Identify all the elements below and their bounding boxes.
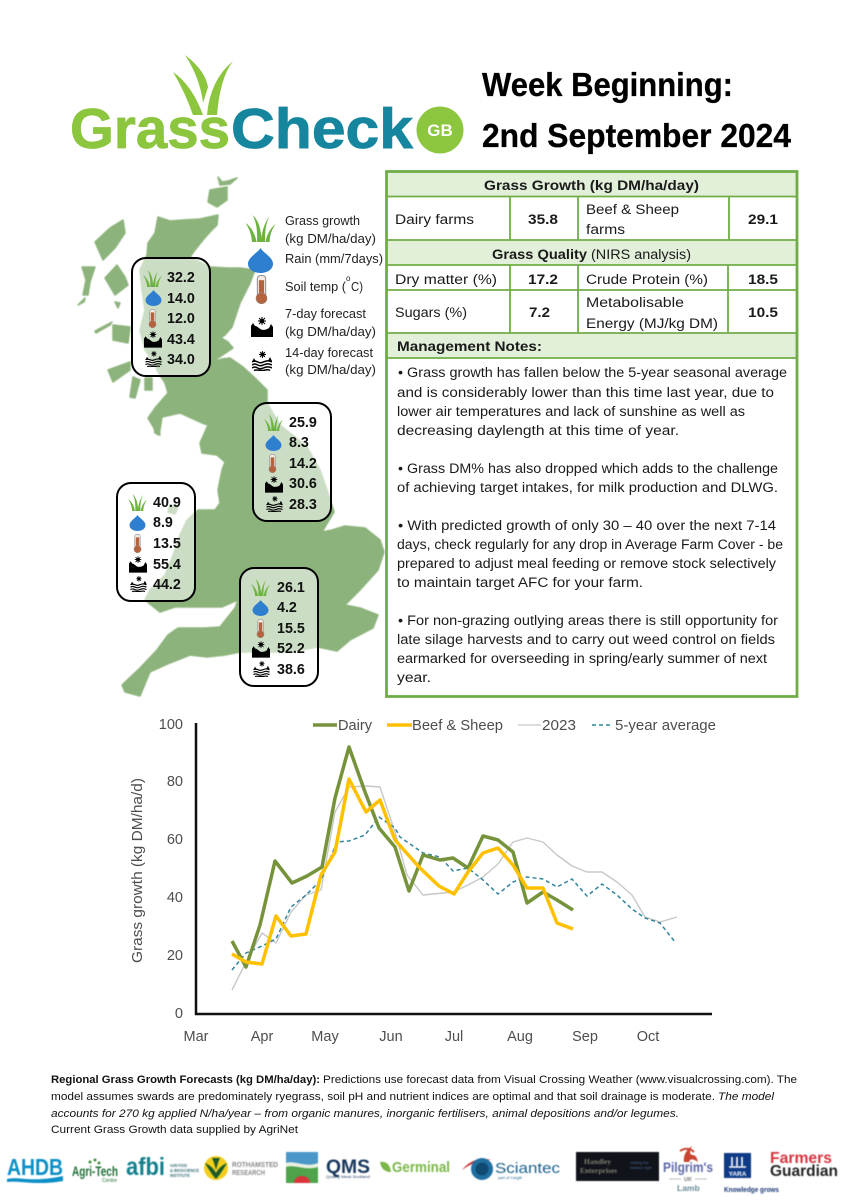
regional panel: Scotland: [132, 258, 210, 376]
table row: dry matter and crude protein: [395, 272, 778, 288]
icon: rain: [248, 248, 273, 273]
management note 2: [397, 461, 778, 496]
footnote text: Predictions use forecast data from Visual Crossing Weather (www.visualcrossing.com). The: [323, 1074, 797, 1086]
management note 3: to maintain target AFC for your farm.: [397, 575, 643, 591]
regional panel: South England: 4.2: [277, 600, 297, 616]
table row: dairy and beef and sheep growth: farms: [586, 222, 625, 238]
legend text: soil temp: [285, 274, 363, 294]
legend text: soil temp: o: [346, 274, 351, 283]
table row: dry matter and crude protein: Crude Protein (%): [586, 272, 708, 288]
logo: Farmers Guardian: [770, 1150, 838, 1180]
logo: GrassCheck GB: Check: [231, 97, 413, 161]
management note 3: [397, 518, 783, 591]
line chart: grass growth: [130, 717, 716, 1045]
management note 1: and is considerably lower than this time last year, due to: [397, 385, 774, 401]
logo: Farmers Guardian: Guardian: [770, 1163, 838, 1180]
management note 3: prepared to adjust meal feeding or remove stock selectively: [397, 556, 777, 572]
title: week beginning: 2nd September 2024: [482, 117, 792, 154]
table row: dry matter and crude protein: 18.5: [748, 272, 778, 288]
management note 1: decreasing daylength at this time of year.: [397, 423, 679, 439]
table row: dry matter and crude protein: Dry matter (%): [395, 272, 497, 288]
regional panel: Scotland: 43.4: [167, 332, 195, 348]
logo: Agri-Tech Centre: Agri-Tech: [72, 1164, 118, 1179]
logo: Agri-Tech Centre: [72, 1158, 118, 1184]
regional panel: South England: 26.1: [277, 580, 305, 596]
x axis labels: Oct: [637, 1029, 659, 1045]
footnote text: [51, 1074, 797, 1136]
logo: Sciantec: [462, 1158, 561, 1180]
table row: sugars and metabolisable energy: Energy (MJ/kg DM): [586, 316, 718, 332]
logo: AFBI: afbi: [126, 1153, 165, 1181]
legend text: grass growth: Grass growth: [285, 214, 360, 228]
footnote text: The model: [718, 1091, 775, 1103]
table row: dairy and beef and sheep growth: [395, 202, 778, 238]
x axis labels: Aug: [507, 1029, 533, 1045]
regional panel: Wales: 8.9: [153, 515, 173, 531]
icon: soil temperature: [256, 276, 267, 304]
regional panel: Scotland: 12.0: [167, 311, 195, 327]
logo: green and blue square: [286, 1152, 318, 1183]
logo: Rothamsted Research: ROTHAMSTED: [232, 1162, 278, 1169]
regional panel: North England: [253, 403, 331, 521]
regional panel: Wales: 13.5: [153, 536, 181, 552]
regional panel: Scotland: 32.2: [167, 270, 195, 286]
logo: Sciantec: part of Cargill: [498, 1175, 522, 1180]
icon: logo grass blades: [173, 55, 233, 115]
logo: AFBI: INSTITUTE: [170, 1173, 191, 1179]
x axis labels: Apr: [251, 1029, 273, 1045]
logo: Pilgrims UK Lamb: UK: [684, 1177, 692, 1183]
chart legend: Beef & Sheep: [412, 718, 503, 734]
logo: Yara: Knowledge grows: [724, 1187, 779, 1194]
x axis labels: Jun: [379, 1029, 403, 1045]
y axis labels: 20: [167, 948, 183, 964]
legend text: 14-day forecast: [285, 346, 376, 377]
table row: sugars and metabolisable energy: Metabolisable: [586, 295, 684, 311]
y axis labels: 40: [167, 890, 183, 906]
logo: Handley Enterprises: Enterprises: [580, 1166, 617, 1175]
regional panel: South England: 52.2: [277, 641, 305, 657]
legend text: 7-day forecast: (kg DM/ha/day): [285, 325, 376, 339]
x axis labels: Sep: [572, 1029, 598, 1045]
legend text: soil temp: Soil temp (: [285, 280, 347, 294]
chart legend: 5-year average: [615, 718, 716, 734]
map legend: [246, 214, 383, 377]
table header: grass quality: (NIRS analysis): [591, 247, 691, 263]
regional panel: Wales: 55.4: [153, 557, 181, 573]
logo: AFBI: [126, 1153, 200, 1181]
y axis labels: 100: [159, 717, 183, 733]
icon: 14-day forecast: [252, 351, 272, 371]
logo: Handley Enterprises: balance right: [630, 1166, 653, 1170]
table header: grass growth: [387, 172, 797, 196]
table header: grass quality: [387, 240, 797, 265]
footnote text: accounts for 270 kg applied N/ha/year – from organic manures, inorganic fertilisers, animal depositions and/or legumes.: [51, 1108, 679, 1120]
axes: [196, 723, 712, 1014]
map of Great Britain: [78, 177, 384, 696]
x axis labels: [184, 1029, 659, 1045]
icon: 7-day forecast: [251, 317, 273, 337]
footnote text: model assumes swards are predominately ryegrass, soil pH and nutrient indices are optimal and that soil drainage is moderate.: [51, 1091, 715, 1103]
logo: Rothamsted Research: [204, 1156, 278, 1180]
legend text: soil temp: C): [351, 280, 363, 294]
logo: Pilgrims UK Lamb: Lamb: [677, 1183, 700, 1193]
management note 4: earmarked for overseeding in spring/early summer of next: [397, 651, 767, 667]
series: 2023: [232, 786, 677, 990]
management note 3: days, check regularly for any drop in Average Farm Cover - be: [397, 537, 783, 553]
regional panel: South England: 15.5: [277, 621, 305, 637]
management note 3: • With predicted growth of only 30 – 40 over the next 7-14: [398, 518, 776, 534]
legend text: grass growth: [285, 214, 376, 246]
table header: grass quality: Grass Quality: [492, 247, 587, 263]
y axis labels: [159, 717, 183, 1022]
logo: AFBI: AGRI FOOD: [170, 1163, 187, 1169]
panel: data table and management notes: [386, 172, 797, 696]
footnote text: Regional Grass Growth Forecasts (kg DM/ha/day):: [51, 1074, 320, 1086]
chart legend: 2023: [542, 718, 576, 734]
logo: Handley Enterprises: Getting the: [630, 1161, 649, 1165]
logo: GrassCheck GB: [70, 55, 464, 161]
management note 2: • Grass DM% has also dropped which adds to the challenge: [398, 461, 778, 477]
regional panel: North England: 28.3: [289, 497, 317, 513]
legend text: 14-day forecast: (kg DM/ha/day): [285, 363, 376, 377]
table row: dairy and beef and sheep growth: Dairy farms: [395, 212, 474, 228]
management note 1: • Grass growth has fallen below the 5-year seasonal average: [398, 365, 787, 381]
chart legend: [313, 718, 716, 734]
regional panel: South England: 38.6: [277, 662, 305, 678]
table header: grass growth: Grass Growth (kg DM/ha/day): [484, 178, 699, 194]
logo: Handley Enterprises: Handley: [584, 1157, 611, 1166]
table row: dairy and beef and sheep growth: Beef & Sheep: [586, 202, 679, 218]
logo: GrassCheck GB: Grass: [70, 97, 230, 161]
x axis labels: Jul: [445, 1029, 463, 1045]
regional panel: Scotland: 34.0: [167, 352, 195, 368]
y axis labels: 60: [167, 832, 183, 848]
regional panel: Wales: 40.9: [153, 495, 181, 511]
title: week beginning: [482, 66, 792, 154]
table row: sugars and metabolisable energy: Sugars (%): [395, 305, 467, 321]
logo: Germinal: Germinal: [392, 1159, 450, 1176]
y axis labels: 80: [167, 774, 183, 790]
logo: Agri-Tech Centre: Centre: [102, 1178, 117, 1184]
icon: grass growth: [246, 215, 276, 242]
logo: QMS: Quality Meat Scotland: [326, 1174, 370, 1179]
series: dairy: [232, 747, 573, 967]
y axis title: Grass growth (kg DM/ha/d): [130, 778, 146, 963]
management note 1: lower air temperatures and lack of sunshine as well as: [397, 404, 745, 420]
x axis labels: May: [311, 1029, 339, 1045]
series: 5-year average: [232, 817, 675, 970]
logo: GrassCheck GB: GB: [427, 121, 453, 140]
regional panel: North England: 8.3: [289, 435, 309, 451]
sponsor logos: [7, 1146, 838, 1194]
logo: Handley Enterprises: [576, 1152, 659, 1181]
title: week beginning: Week Beginning:: [482, 66, 733, 103]
logo: AHDB: AHDB: [7, 1154, 63, 1180]
table row: dairy and beef and sheep growth: 29.1: [748, 212, 778, 228]
table row: dry matter and crude protein: 17.2: [528, 272, 558, 288]
table row: sugars and metabolisable energy: 7.2: [529, 305, 550, 321]
logo: AFBI: & BIOSCIENCE: [170, 1168, 200, 1174]
table row: dairy and beef and sheep growth: 35.8: [528, 212, 558, 228]
legend text: 14-day forecast: 14-day forecast: [285, 346, 374, 360]
table header: management notes: [387, 333, 797, 358]
logo: Rothamsted Research: RESEARCH: [232, 1170, 265, 1177]
logo: Pilgrims UK Lamb: [663, 1146, 713, 1193]
table row: sugars and metabolisable energy: [395, 295, 778, 332]
logo: Yara: YARA: [729, 1171, 747, 1178]
logo: Farmers Guardian: Farmers: [770, 1150, 832, 1167]
table row: sugars and metabolisable energy: 10.5: [748, 305, 778, 321]
management note 4: • For non-grazing outlying areas there is still opportunity for: [398, 613, 778, 629]
management note 4: year.: [397, 670, 431, 686]
x axis labels: Mar: [184, 1029, 209, 1045]
management note 4: late silage harvests and to carry out weed control on fields: [397, 632, 775, 648]
legend text: 7-day forecast: [285, 307, 376, 339]
regional panel: South England: [240, 568, 318, 686]
series: beef and sheep: [232, 779, 573, 964]
regional panel: North England: 25.9: [289, 415, 317, 431]
logo: QMS: QMS: [326, 1157, 370, 1178]
regional panel: Wales: 44.2: [153, 577, 181, 593]
logo: Sciantec: Sciantec: [495, 1160, 561, 1177]
regional panel: North England: 30.6: [289, 476, 317, 492]
regional panel: Scotland: 14.0: [167, 291, 195, 307]
legend text: rain: Rain (mm/7days): [285, 252, 383, 266]
chart legend: Dairy: [338, 718, 373, 734]
regional panel: North England: 14.2: [289, 456, 317, 472]
y axis labels: 0: [175, 1006, 183, 1022]
management note 2: of achieving target intakes, for milk production and DLWG.: [397, 480, 778, 496]
legend text: 7-day forecast: 7-day forecast: [285, 307, 367, 321]
management note 1: [397, 365, 787, 439]
regional panel: Wales: [117, 483, 195, 601]
logo: Pilgrims UK Lamb: Pilgrim's: [663, 1159, 713, 1175]
table header: management notes: Management Notes:: [397, 339, 542, 355]
management note 4: [397, 613, 778, 686]
logo: Yara: [724, 1153, 779, 1194]
footnote text: Current Grass Growth data supplied by AgriNet: [51, 1124, 299, 1136]
legend text: grass growth: (kg DM/ha/day): [285, 232, 376, 246]
